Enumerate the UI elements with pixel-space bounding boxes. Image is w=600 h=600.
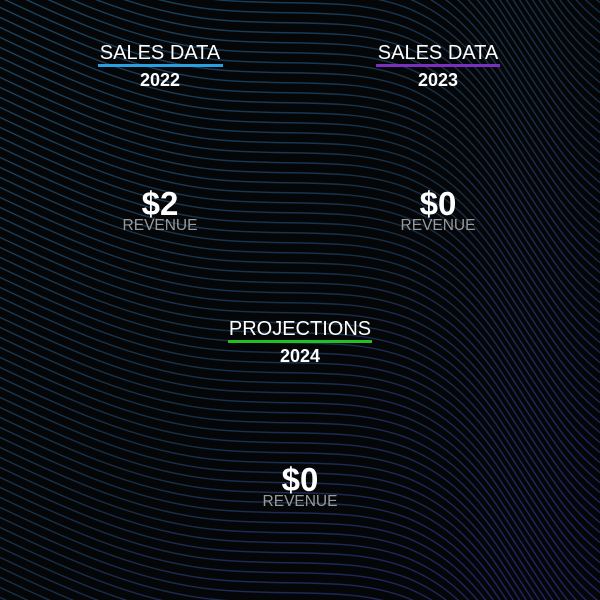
heading: projections: PROJECTIONS [229,318,371,340]
underline: green [228,340,372,343]
value $0: $0 [282,461,318,498]
year 2024: 2024 [280,346,320,366]
underline: blue [98,64,223,67]
label revenue: REVENUE [123,217,197,234]
value $0: $0 [420,185,456,222]
heading: sales data 2022: SALES DATA [100,42,221,64]
label revenue: REVENUE [401,217,475,234]
panel: sales data 2023 [376,42,500,234]
heading: sales data 2023: SALES DATA [378,42,499,64]
panel: sales data 2022 [98,42,223,234]
year 2023: 2023 [418,70,458,90]
label revenue: REVENUE [263,493,337,510]
underline: purple [376,64,500,67]
value $2: $2 [142,185,178,222]
panel: projections 2024 [228,318,372,510]
year 2022: 2022 [140,70,180,90]
